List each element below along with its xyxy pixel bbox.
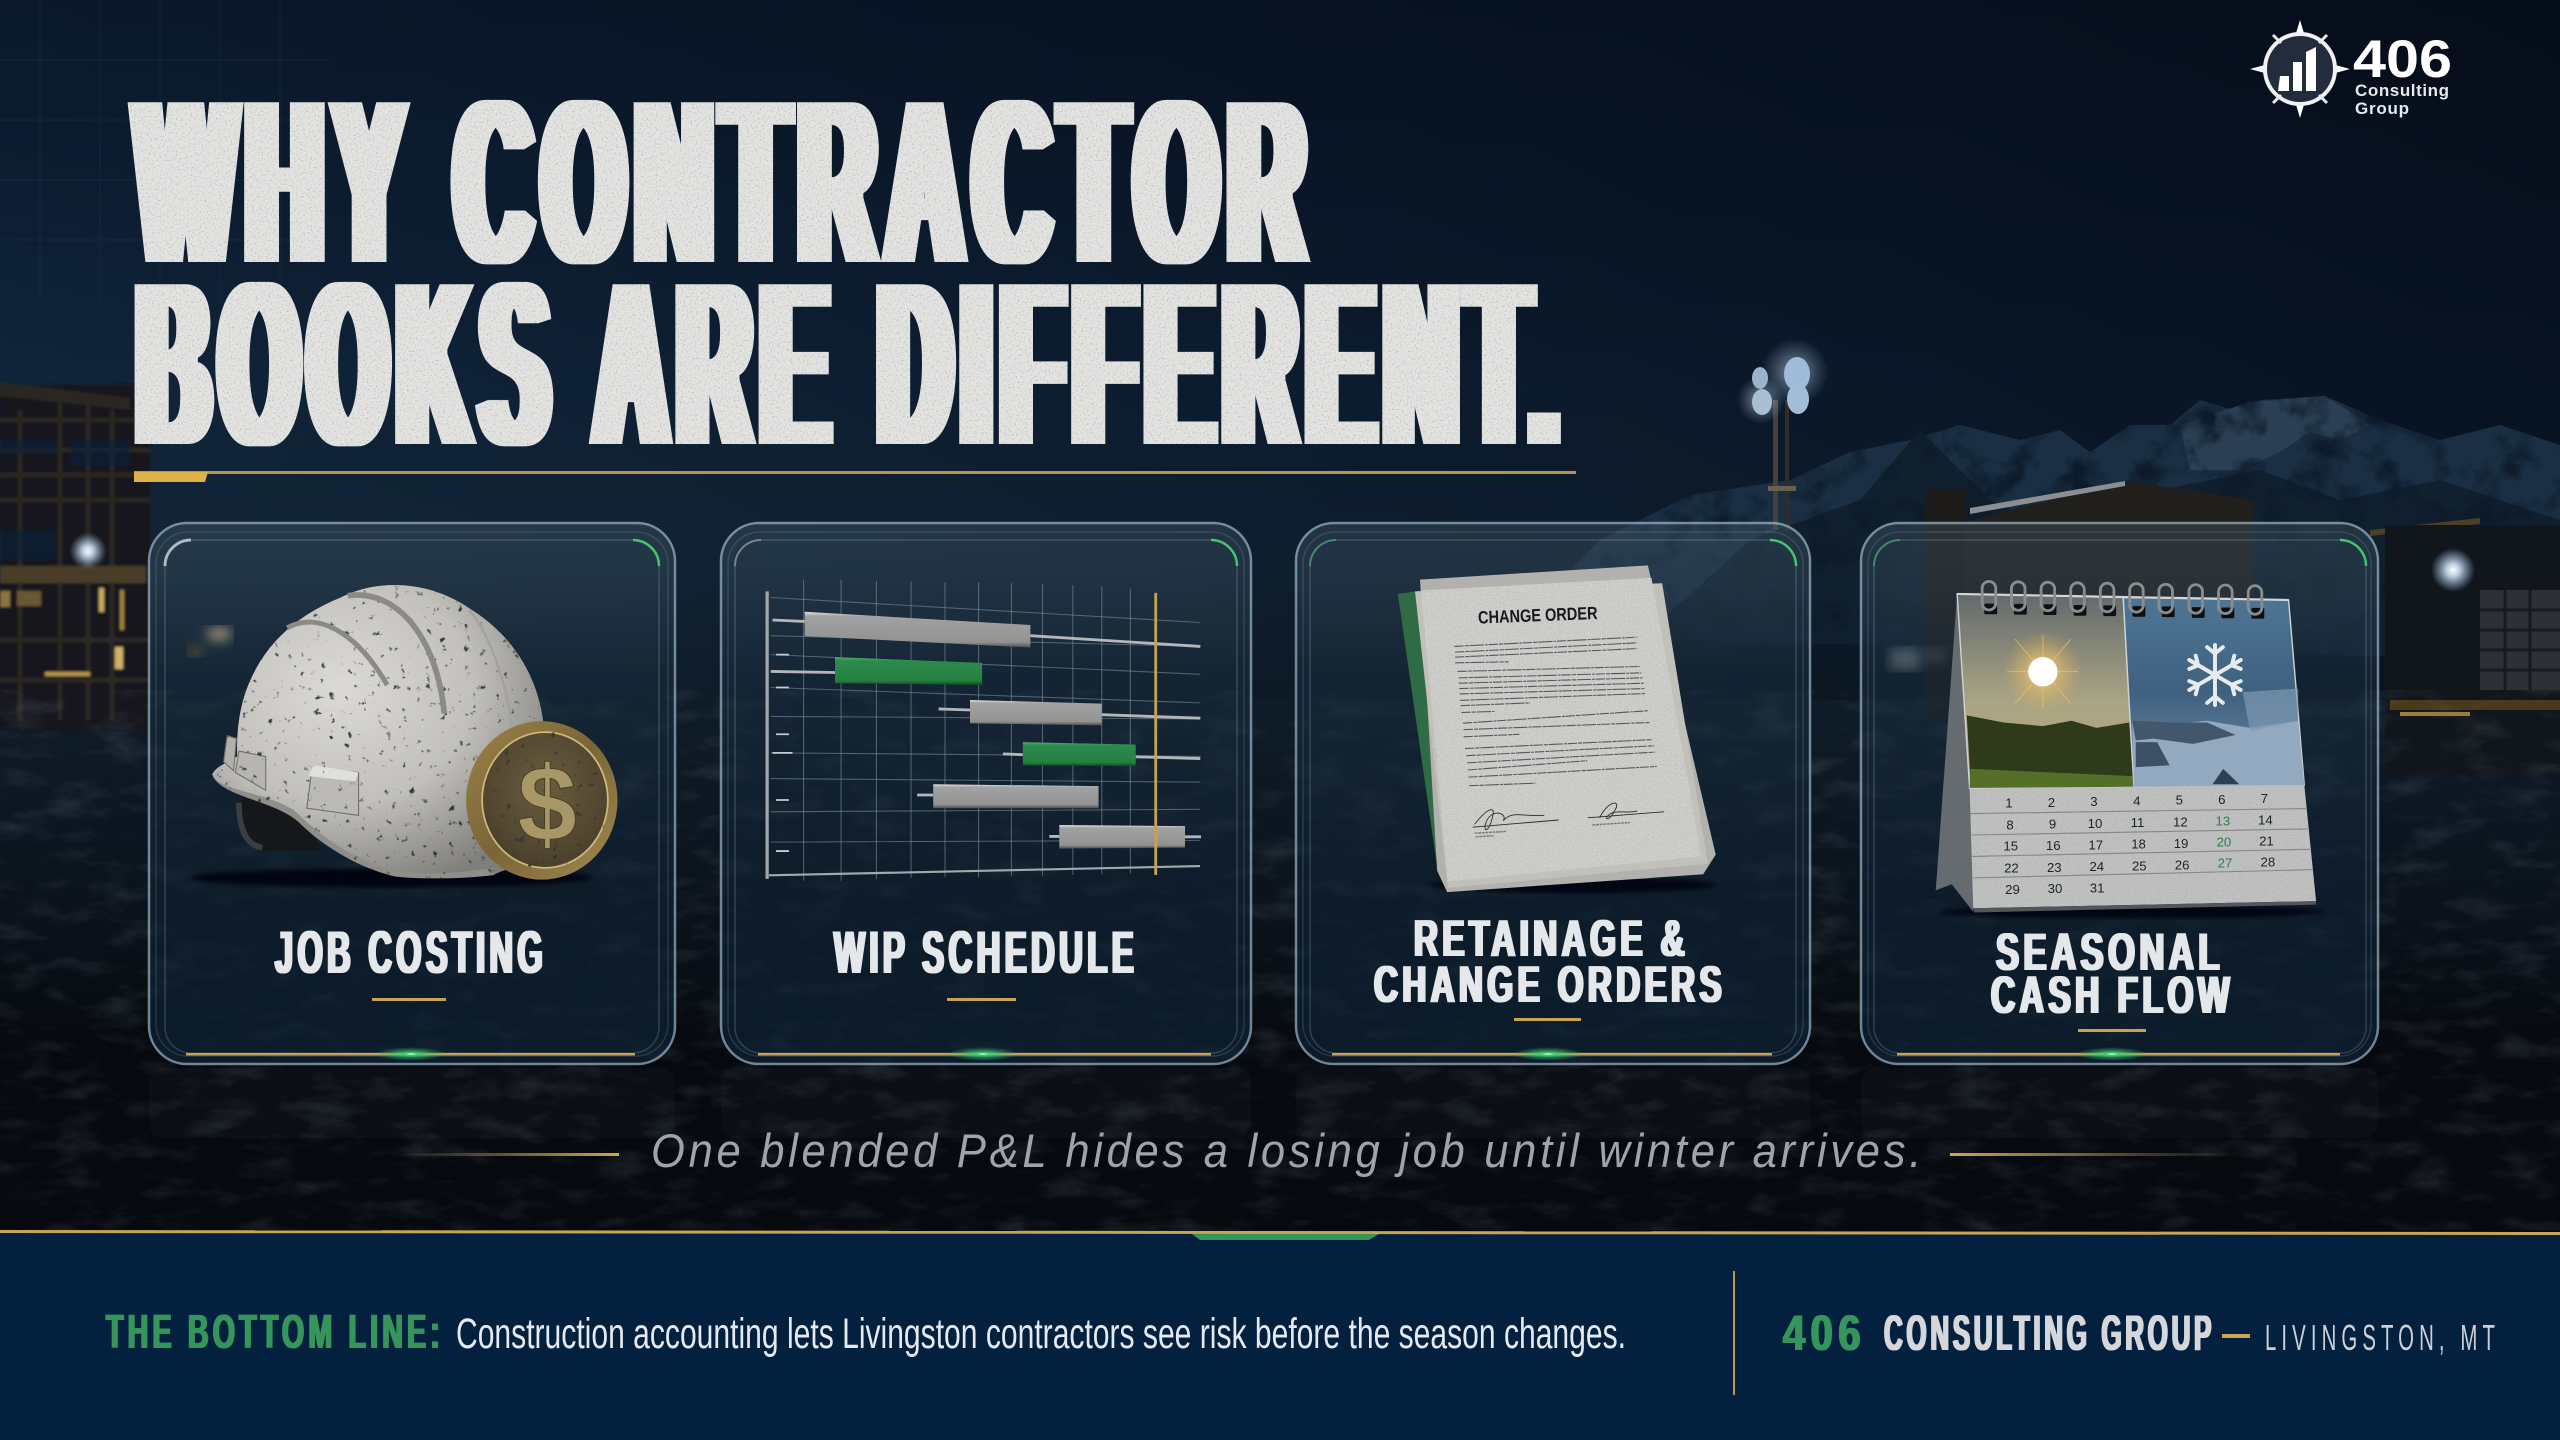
- date numbers: 11: [2131, 815, 2144, 830]
- date numbers: 9: [2049, 817, 2056, 832]
- panel: seasonal cash flow: [1861, 523, 2378, 1064]
- accent dash: [2078, 1029, 2146, 1032]
- panel: WIP schedule: [721, 523, 1251, 1064]
- bottom line statement: [106, 1306, 1626, 1359]
- panel: job costing: [149, 523, 675, 1064]
- company signature: 406: [1783, 1305, 1866, 1361]
- gantt bars: [805, 612, 1185, 849]
- date numbers: 15: [2003, 839, 2018, 854]
- icon: change order document: [1398, 565, 1716, 893]
- date numbers: 25: [2132, 858, 2147, 873]
- today marker: [1154, 593, 1157, 875]
- date numbers: 14: [2258, 812, 2273, 827]
- ground texture: [0, 690, 2560, 1230]
- date numbers: 31: [2090, 880, 2104, 895]
- bottom line statement: Construction accounting lets Livingston contractors see risk before the season changes.: [456, 1310, 1626, 1358]
- coin: $: [517, 743, 577, 863]
- label: CHANGE ORDERS: [1374, 956, 1726, 1014]
- logo: Group: [2355, 99, 2409, 118]
- date numbers: 22: [2004, 860, 2019, 875]
- label: [1374, 910, 1726, 1014]
- blueprint grid: [0, 0, 330, 300]
- axes: [767, 591, 1200, 879]
- accent dash: [1514, 1018, 1581, 1021]
- date pad: [1970, 785, 2316, 908]
- date numbers: 19: [2174, 836, 2188, 851]
- label: [1991, 923, 2234, 1025]
- date numbers: 28: [2261, 854, 2275, 869]
- construction frame left: [0, 382, 150, 730]
- bottom line statement: THE BOTTOM LINE:: [106, 1306, 444, 1359]
- date numbers: 3: [2090, 794, 2098, 809]
- date numbers: 13: [2216, 814, 2230, 829]
- signatures: [1473, 803, 1664, 837]
- date numbers: 27: [2218, 855, 2232, 870]
- icon: hard hat with coin: [191, 585, 617, 887]
- label: JOB COSTING: [275, 919, 547, 986]
- label: SEASONAL: [1996, 923, 2224, 982]
- card frame: [1861, 523, 2378, 1064]
- icon: desk calendar: [1936, 581, 2325, 918]
- label: CASH FLOW: [1991, 966, 2234, 1025]
- summer photo: [1957, 594, 2134, 789]
- grid lines: [771, 580, 1200, 881]
- date numbers: 21: [2259, 834, 2274, 849]
- date numbers: 8: [2006, 817, 2014, 832]
- floodlight tower: [1737, 338, 1829, 530]
- whiskers: [771, 620, 1201, 837]
- date numbers: 17: [2088, 837, 2103, 852]
- logo: Consulting: [2355, 81, 2449, 100]
- date numbers: 4: [2133, 793, 2140, 808]
- title: [137, 50, 1570, 497]
- date numbers: 2: [2048, 795, 2055, 810]
- date numbers: 7: [2261, 791, 2268, 806]
- date numbers: 20: [2217, 834, 2231, 849]
- footer band: [0, 1230, 2560, 1440]
- card frame: [1296, 523, 1810, 1064]
- date numbers: 12: [2173, 814, 2188, 829]
- company signature: CONSULTING GROUP: [1884, 1305, 2215, 1361]
- date numbers: 6: [2218, 792, 2225, 807]
- spiral rings: [1957, 581, 2289, 619]
- title rule: [134, 471, 1576, 482]
- date numbers: 1: [2005, 795, 2013, 810]
- date numbers: 29: [2005, 882, 2020, 897]
- date numbers: 16: [2046, 838, 2061, 853]
- label: RETAINAGE &: [1414, 910, 1689, 968]
- date numbers: 10: [2088, 816, 2102, 831]
- icon: change order document: CHANGE ORDER: [1478, 603, 1598, 628]
- accent dash: [372, 998, 446, 1001]
- date numbers: 30: [2048, 881, 2062, 896]
- date numbers: 24: [2089, 859, 2104, 874]
- date numbers: [2003, 791, 2275, 897]
- date numbers: 18: [2131, 837, 2146, 852]
- coin: [466, 721, 617, 880]
- logo compass icon: [2250, 20, 2350, 118]
- card frame: [149, 523, 675, 1064]
- calendar stand: [1936, 594, 1973, 912]
- winter photo: [2123, 597, 2304, 787]
- document body lines: [1454, 637, 1657, 786]
- panel: retainage and change orders: [1296, 523, 1810, 1064]
- mountains: [1500, 396, 2560, 660]
- gantt chart: [767, 580, 1201, 881]
- date numbers: 5: [2176, 793, 2183, 808]
- card reflections: [149, 1068, 2378, 1138]
- date numbers: 23: [2047, 860, 2062, 875]
- tagline: One blended P&L hides a losing job until winter arrives.: [651, 1124, 1925, 1177]
- logo: 406: [2353, 30, 2452, 89]
- accent dash: [947, 998, 1016, 1001]
- logo: [2250, 20, 2452, 118]
- card frame: [721, 523, 1251, 1064]
- label: WIP SCHEDULE: [834, 919, 1138, 986]
- distant building right: [1925, 481, 2560, 775]
- ticks: [772, 655, 792, 851]
- date numbers: 26: [2175, 858, 2189, 873]
